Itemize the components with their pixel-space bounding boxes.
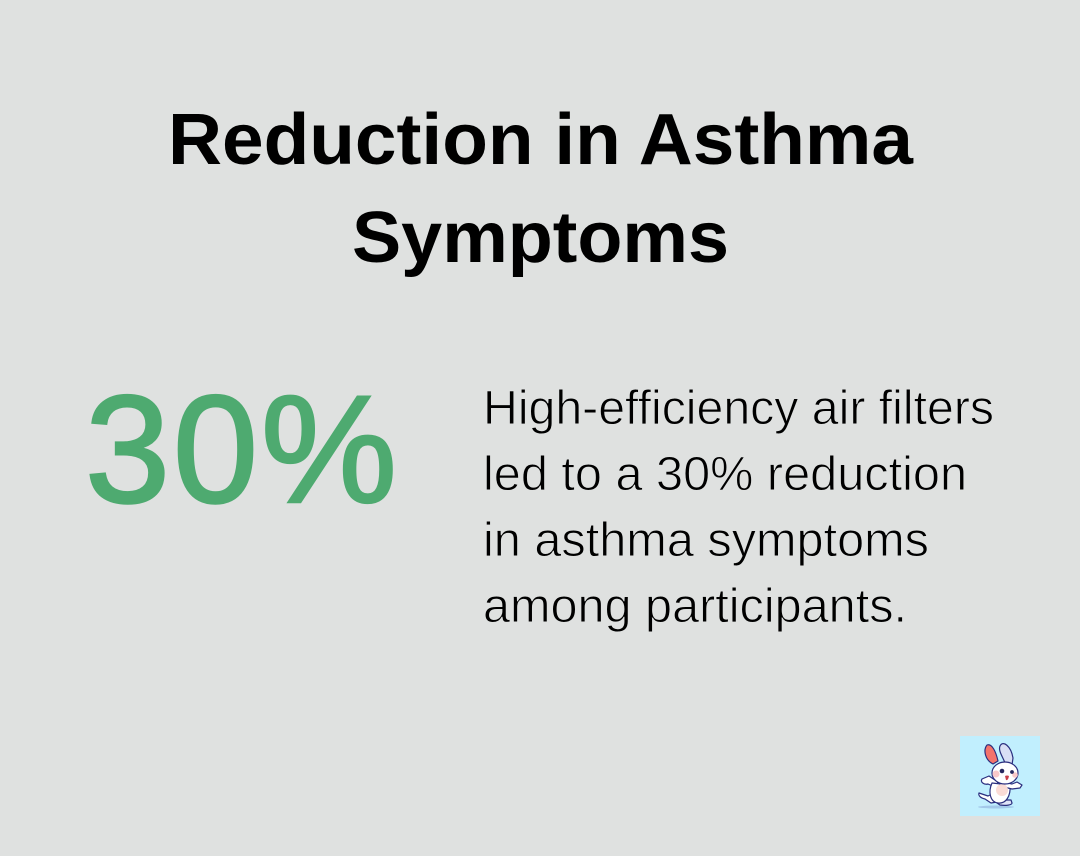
arm left xyxy=(981,776,998,787)
legs xyxy=(979,792,997,803)
body xyxy=(990,783,1010,803)
description text xyxy=(483,382,994,633)
title: Symptoms xyxy=(352,198,729,278)
big statistic: 30%: 30% xyxy=(85,364,397,535)
icon: rabbit logo xyxy=(960,736,1040,816)
arm right xyxy=(1004,782,1022,789)
description text: led to a 30% reduction xyxy=(483,448,967,501)
description text: High-efficiency air filters xyxy=(483,382,994,435)
left ear xyxy=(985,745,998,764)
right ear xyxy=(1000,744,1013,765)
belly xyxy=(996,784,1008,796)
title xyxy=(168,100,914,278)
title: Reduction in Asthma xyxy=(168,100,914,180)
description text: among participants. xyxy=(483,580,907,633)
description text: in asthma symptoms xyxy=(483,514,929,567)
head xyxy=(992,762,1018,784)
cheeks and face xyxy=(992,769,1018,780)
